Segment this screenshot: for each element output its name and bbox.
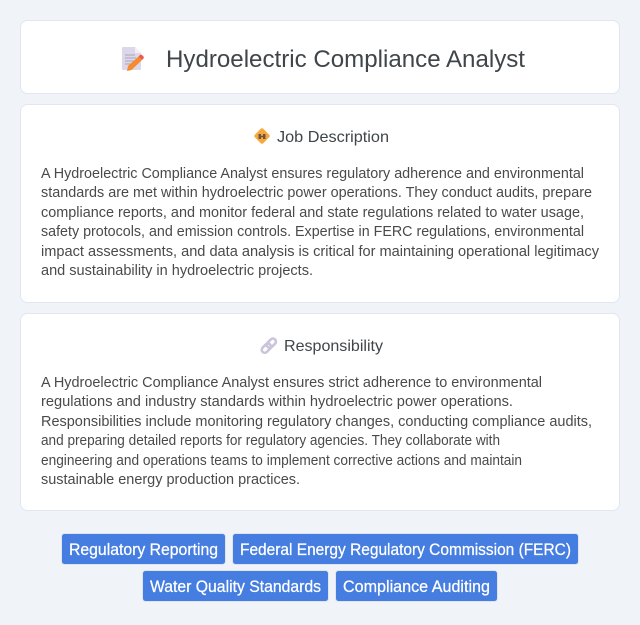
job description text: A Hydroelectric Compliance Analyst ensures regulatory adherence and environmental bbox=[41, 166, 584, 182]
heading: responsibility: Responsibility bbox=[284, 338, 383, 355]
job description text: and sustainability in hydroelectric projects. bbox=[41, 263, 313, 279]
responsibility text: engineering and operations teams to implement corrective actions and maintain bbox=[41, 453, 522, 469]
icon: link bbox=[260, 337, 277, 354]
tag: Compliance Auditing: Compliance Auditing bbox=[343, 578, 490, 596]
tag: Regulatory Reporting bbox=[62, 534, 226, 564]
tag: Water Quality Standards bbox=[142, 570, 328, 602]
tag: FERC bbox=[232, 534, 578, 564]
tag: Regulatory Reporting: Regulatory Reporting bbox=[69, 541, 218, 559]
responsibility text: A Hydroelectric Compliance Analyst ensures strict adherence to environmental bbox=[41, 375, 542, 391]
responsibility text: regulations and industry standards within hydroelectric power operations. bbox=[41, 394, 513, 410]
panel: job description bbox=[20, 104, 620, 302]
icon: warning diamond bbox=[254, 128, 270, 144]
icon: document with pencil bbox=[122, 47, 144, 71]
panel: title bbox=[20, 20, 620, 94]
tag: FERC: Federal Energy Regulatory Commission (FERC) bbox=[240, 541, 571, 559]
title text: Hydroelectric Compliance Analyst bbox=[166, 46, 525, 73]
job description text: standards are met within hydroelectric power operations. They conduct audits, prepare bbox=[41, 185, 592, 201]
responsibility text: sustainable energy production practices. bbox=[41, 472, 300, 488]
responsibility text: and preparing detailed reports for regulatory agencies. They collaborate with bbox=[41, 433, 500, 449]
tag: Water Quality Standards: Water Quality Standards bbox=[150, 578, 321, 596]
job description text bbox=[41, 166, 600, 279]
tag: Compliance Auditing bbox=[336, 570, 498, 602]
responsibility text bbox=[41, 375, 592, 488]
panel: responsibility bbox=[20, 314, 620, 510]
job description text: compliance reports, and monitor federal and state regulations related to water usage, bbox=[41, 205, 584, 221]
job description text: impact assessments, and data analysis is critical for maintaining operational legitimacy bbox=[41, 244, 600, 260]
heading: job description: Job Description bbox=[277, 129, 389, 146]
responsibility text: Responsibilities include monitoring regulatory changes, conducting compliance audits, bbox=[41, 414, 592, 430]
job description text: safety protocols, and emission controls. Expertise in FERC regulations, environmental bbox=[41, 224, 584, 240]
